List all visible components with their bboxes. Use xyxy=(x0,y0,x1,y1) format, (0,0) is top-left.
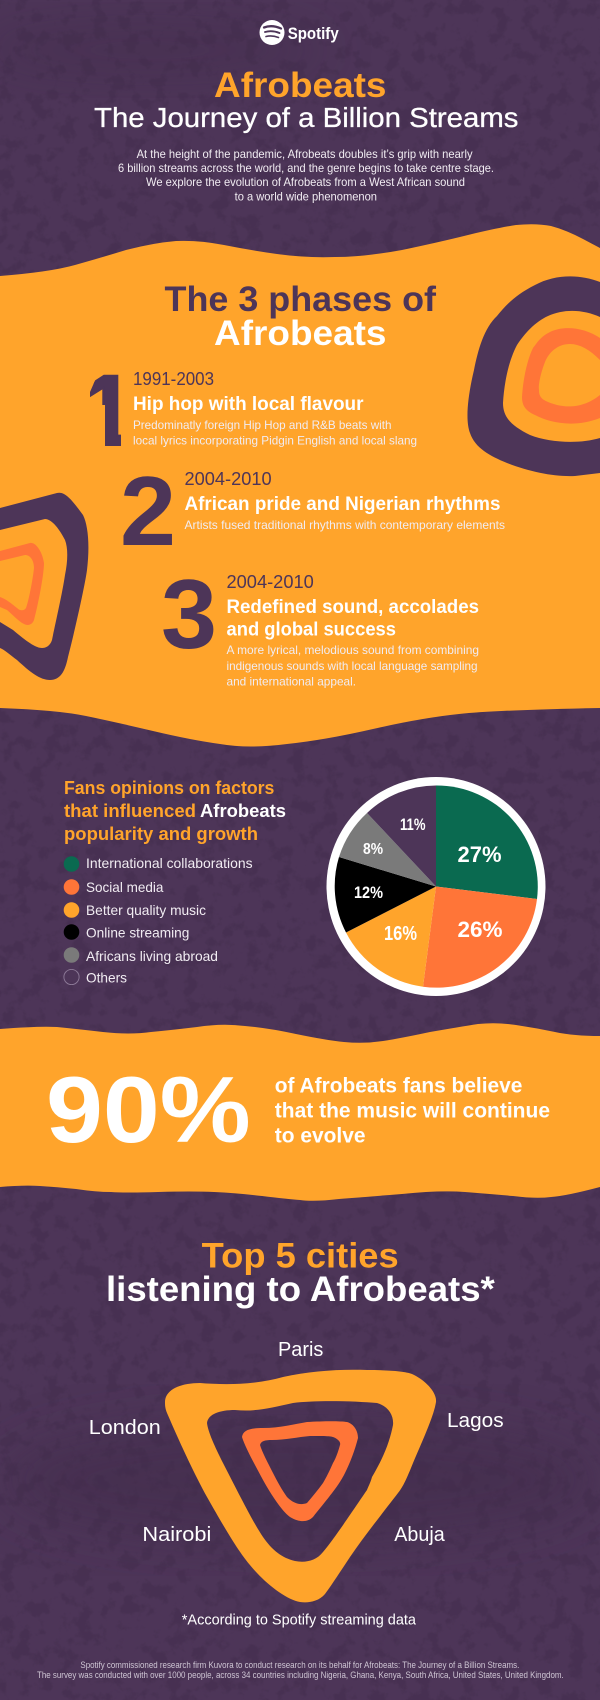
intro text: to a world wide phenomenon xyxy=(235,190,377,204)
phase 3: 2004-2010 xyxy=(226,572,314,592)
heading: fans opinions: that influenced xyxy=(64,800,196,821)
phase 1: 1991-2003 xyxy=(133,369,214,389)
icon: spotify logo xyxy=(260,20,339,45)
icon: left ring decoration xyxy=(0,493,88,680)
legend: Africans living abroad xyxy=(86,948,218,964)
pie chart: 27% xyxy=(458,842,502,867)
city labels: Paris xyxy=(278,1339,323,1361)
stat: 90 percent: that the music will continue xyxy=(275,1100,550,1123)
legend xyxy=(64,855,253,986)
heading: the 3 phases: Afrobeats xyxy=(214,314,386,353)
icon: spotify logo: Spotify xyxy=(288,24,339,43)
stat: 90 percent: of Afrobeats fans believe xyxy=(275,1075,522,1098)
intro text: 6 billion streams across the world, and the genre begins to take centre stage. xyxy=(118,161,494,175)
panel: phases background wave xyxy=(0,224,600,746)
pie chart xyxy=(326,777,546,996)
city labels: Lagos xyxy=(447,1410,504,1432)
icon: triangular rings xyxy=(165,1370,436,1602)
phase 3: 3 xyxy=(161,559,217,669)
stat: 90 percent: to evolve xyxy=(275,1125,366,1148)
stat: 90 percent: 90% xyxy=(46,1057,251,1162)
note: streaming data: *According to Spotify streaming data xyxy=(182,1611,417,1628)
legend: Better quality music xyxy=(86,902,206,918)
heading: top 5 cities: Top 5 cities xyxy=(202,1237,399,1276)
pie chart: 26% xyxy=(458,917,502,942)
footer text xyxy=(37,1660,564,1681)
heading: fans opinions: Fans opinions on factors xyxy=(64,777,274,798)
phase 3 xyxy=(161,559,479,689)
city labels xyxy=(89,1339,504,1546)
subtitle: The Journey of a Billion Streams xyxy=(94,102,518,133)
panel: intro header xyxy=(94,20,518,204)
phase 2: 2 xyxy=(120,456,176,566)
heading: top 5 cities: listening to Afrobeats* xyxy=(106,1270,495,1309)
phase 3: Redefined sound, accolades xyxy=(226,596,479,618)
legend: Social media xyxy=(86,879,164,895)
phase 3: A more lyrical, melodious sound from combining xyxy=(226,643,479,657)
city labels: Nairobi xyxy=(142,1524,211,1546)
phase 1: local lyrics incorporating Pidgin English and local slang xyxy=(133,434,417,448)
phase 2: African pride and Nigerian rhythms xyxy=(184,493,501,515)
legend: Others xyxy=(86,970,127,986)
pie chart: 11% xyxy=(400,815,426,834)
phase 3: and international appeal. xyxy=(226,675,356,689)
heading: the 3 phases: The 3 phases of xyxy=(164,280,436,319)
stat: 90 percent xyxy=(46,1057,550,1162)
phase 1: Predominatly foreign Hip Hop and R&B beats with xyxy=(133,418,392,432)
city labels: London xyxy=(89,1417,161,1439)
intro text xyxy=(118,147,494,204)
legend: International collaborations xyxy=(86,855,253,871)
legend: Online streaming xyxy=(86,925,189,941)
phase 1: Hip hop with local flavour xyxy=(133,393,364,415)
phase 2 xyxy=(120,456,505,566)
phase 1 xyxy=(90,372,416,447)
heading: top 5 cities xyxy=(106,1237,495,1309)
footer text: Spotify commissioned research firm Kuvora to conduct research on its behalf for Afrobeats: The Journey of a Billion Streams. xyxy=(80,1660,519,1671)
heading: fans opinions: Afrobeats xyxy=(200,800,286,821)
heading: fans opinions: popularity and growth xyxy=(64,823,258,844)
panel: 90 percent stat wave xyxy=(0,1023,600,1201)
pie chart: 12% xyxy=(354,883,383,902)
phase 3: indigenous sounds with local language sampling xyxy=(226,659,478,673)
phase 3: and global success xyxy=(226,619,396,641)
phase 1: 1 xyxy=(80,354,136,468)
intro text: At the height of the pandemic, Afrobeats doubles it’s grip with nearly xyxy=(137,147,473,161)
intro text: We explore the evolution of Afrobeats from a West African sound xyxy=(146,175,465,189)
phase 2: 2004-2010 xyxy=(184,469,272,489)
icon: right ring decoration xyxy=(467,276,600,476)
heading: the 3 phases xyxy=(164,280,436,353)
pie chart: 8% xyxy=(363,841,383,858)
phase 2: Artists fused traditional rhythms with contemporary elements xyxy=(184,518,505,532)
heading: fans opinions xyxy=(64,777,286,844)
city labels: Abuja xyxy=(394,1524,446,1546)
pie chart: 16% xyxy=(384,923,417,945)
title: Afrobeats xyxy=(214,66,386,105)
